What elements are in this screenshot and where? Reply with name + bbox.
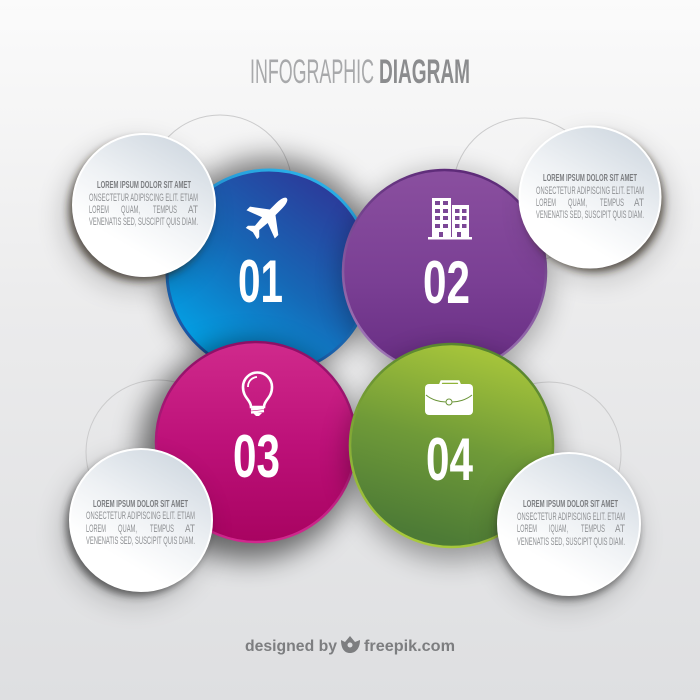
callout: bottom right: LOREM	[517, 523, 537, 535]
callout: bottom left: AT	[185, 523, 195, 535]
callout: bottom right: TEMPUS	[581, 523, 605, 535]
callout: bottom left: QUAM,	[118, 523, 137, 535]
callout: bottom left: VENENATIS SED, SUSCIPIT QUIS DIAM.	[86, 535, 195, 547]
number 04: 04	[426, 426, 473, 493]
icon: airplane	[237, 184, 301, 248]
disc 04: green	[348, 344, 556, 560]
number 02: 02	[423, 249, 470, 316]
callout: top left: ONSECTETUR ADIPISCING ELIT. ETIAM	[89, 192, 198, 204]
footer credit: designed by	[245, 638, 337, 655]
callout: bottom left: LOREM IPSUM DOLOR SIT AMET	[93, 498, 188, 510]
disc 03: magenta	[140, 342, 356, 560]
disc 02: purple	[342, 170, 550, 381]
icon: light bulb	[243, 372, 272, 416]
footer credit: freepik.com	[364, 638, 455, 655]
callout: top right	[520, 126, 669, 279]
outline ring: top right	[453, 118, 597, 262]
callout: bottom right: LOREM IPSUM DOLOR SIT AMET	[523, 498, 618, 510]
callout: top right: QUAM,	[568, 197, 587, 209]
callout: top left: LOREM IPSUM DOLOR SIT AMET	[97, 179, 191, 191]
callout: top left: VENENATIS SED, SUSCIPIT QUIS DIAM.	[89, 216, 198, 228]
number 01: 01	[238, 248, 283, 315]
callout: bottom right: IQUAM,	[549, 523, 568, 535]
callout: top left: LOREM	[89, 204, 109, 216]
outline ring: top left	[148, 115, 292, 259]
callout: top left: QUAM,	[121, 204, 140, 216]
callout: bottom left: ONSECTETUR ADIPISCING ELIT. ETIAM	[86, 510, 195, 522]
footer credit	[245, 636, 455, 655]
title: INFOGRAPHIC	[250, 53, 374, 91]
callout: bottom right: AT	[615, 523, 625, 535]
callout: bottom left	[62, 449, 212, 603]
callout: top right: AT	[634, 197, 644, 209]
outline ring: bottom left	[86, 380, 230, 524]
callout: top left: AT	[188, 204, 198, 216]
outline ring: bottom right	[477, 382, 621, 526]
callout: top left	[64, 134, 215, 288]
callout: top right: TEMPUS	[600, 197, 624, 209]
number 03: 03	[233, 423, 280, 490]
disc 01: blue	[162, 158, 378, 374]
icon: briefcase	[425, 382, 473, 415]
icon: building	[428, 198, 472, 240]
callout: top right: LOREM	[536, 197, 556, 209]
callout: top left: TEMPUS	[153, 204, 177, 216]
callout: bottom left: LOREM	[86, 523, 106, 535]
title: DIAGRAM	[379, 53, 470, 91]
callout: bottom right	[494, 453, 640, 607]
callout: bottom left: TEMPUS	[150, 523, 174, 535]
